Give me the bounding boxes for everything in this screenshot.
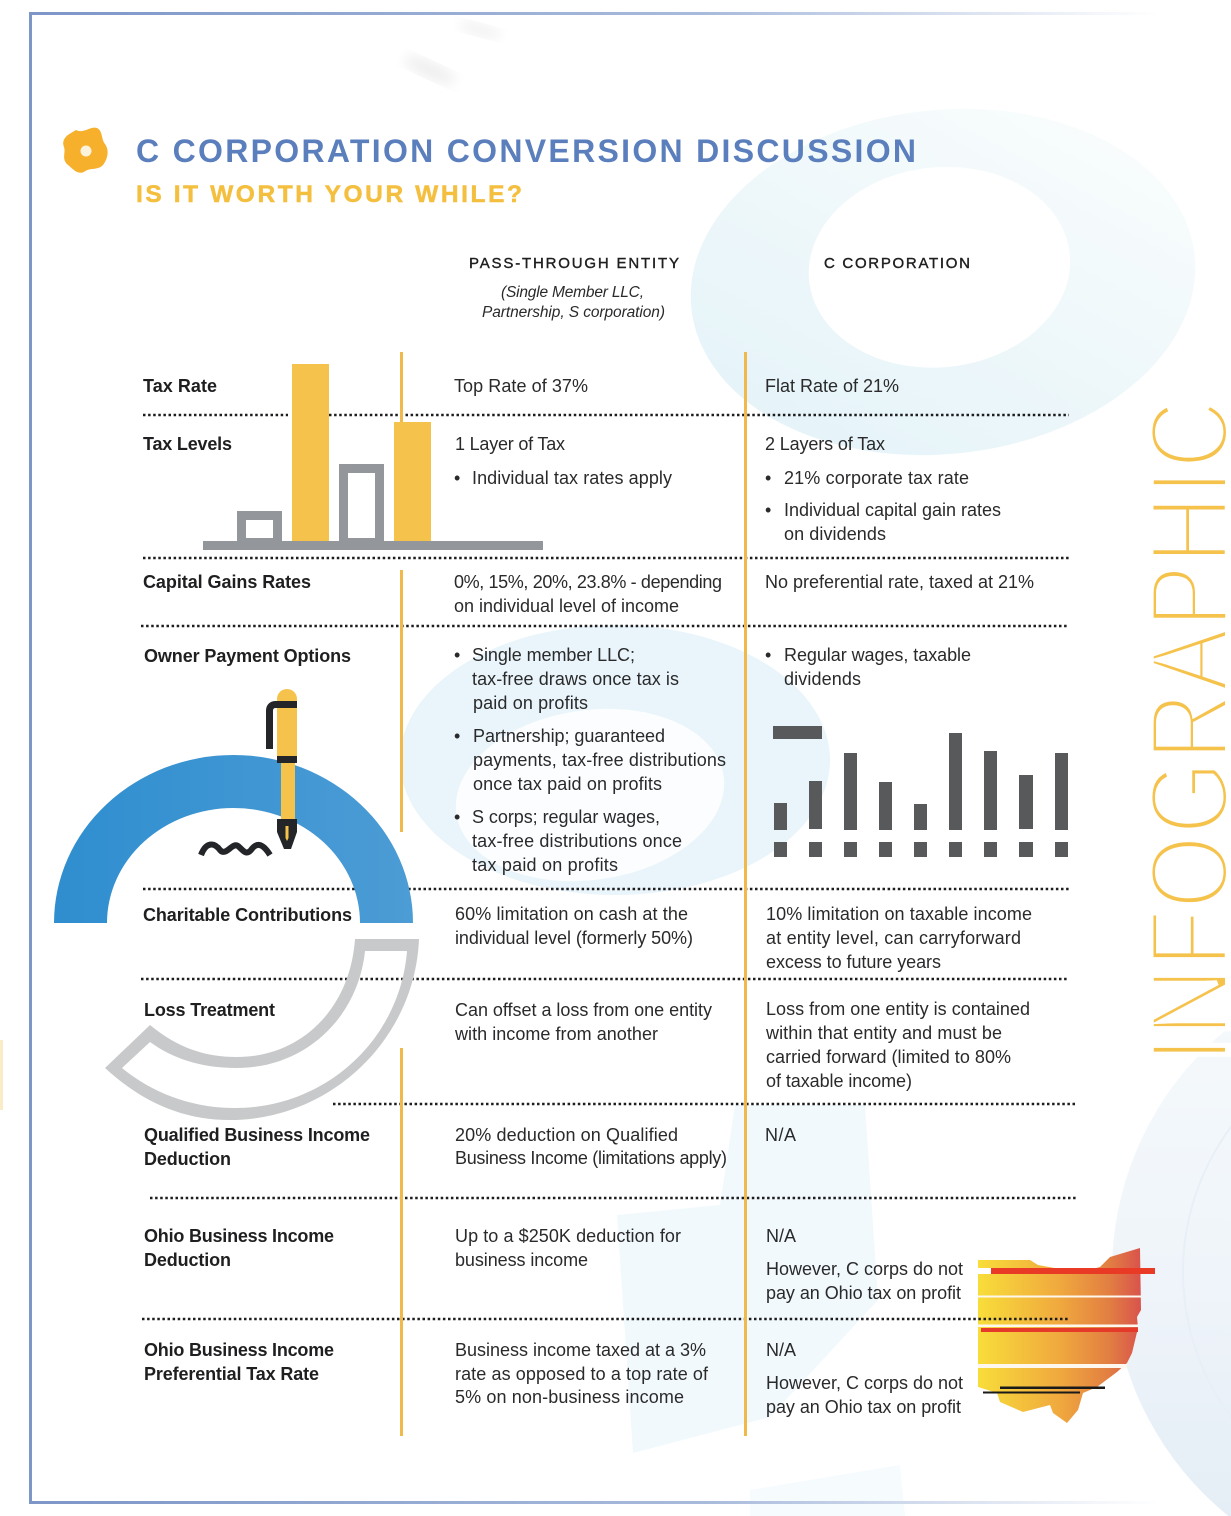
row: tax levels: •	[454, 468, 460, 488]
row: owner payment options: •	[454, 807, 460, 827]
row: charitable contributions: excess to future years	[766, 952, 941, 972]
row: loss treatment: of taxable income)	[766, 1071, 912, 1091]
title: C CORPORATION CONVERSION DISCUSSION	[136, 133, 916, 169]
row: Ohio business income preferential tax rate: However, C corps do not	[766, 1373, 963, 1393]
row: tax levels: 2 Layers of Tax	[765, 434, 885, 454]
icon: orange flower logo	[63, 128, 108, 173]
row: charitable contributions: individual level (formerly 50%)	[455, 928, 693, 948]
row: capital gains rates: No preferential rate, taxed at 21%	[765, 572, 1034, 592]
row: qualified business income deduction: N/A	[765, 1125, 796, 1145]
column header: pass-through entity	[469, 255, 679, 321]
row: loss treatment: Loss Treatment	[144, 1000, 275, 1020]
subtitle: IS IT WORTH YOUR WHILE?	[136, 181, 522, 208]
grey open arc	[105, 939, 419, 1120]
row: tax levels: Individual capital gain rates	[784, 500, 1001, 520]
row: charitable contributions: at entity level, can carryforward	[766, 928, 1021, 948]
row: Ohio business income preferential tax rate: Preferential Tax Rate	[144, 1364, 319, 1384]
row: owner payment options	[144, 645, 971, 875]
blue semicircle arc	[54, 755, 413, 923]
row: tax levels: Tax Levels	[143, 434, 232, 454]
row: owner payment options: •	[454, 726, 460, 746]
row: Ohio business income deduction: Up to a $250K deduction for	[455, 1226, 681, 1246]
row: Ohio business income preferential tax rate: N/A	[766, 1340, 796, 1360]
row: tax levels: on dividends	[784, 524, 886, 544]
row: charitable contributions	[143, 904, 1032, 972]
row: Ohio business income deduction	[144, 1226, 963, 1303]
row: loss treatment: Loss from one entity is contained	[766, 999, 1030, 1019]
row: Ohio business income deduction: Ohio Business Income	[144, 1226, 334, 1246]
row: tax levels	[143, 434, 1001, 544]
column header: C corporation: C CORPORATION	[824, 255, 970, 272]
row: capital gains rates: 0%, 15%, 20%, 23.8% - depending	[454, 572, 722, 592]
row: owner payment options: payments, tax-free distributions	[473, 750, 726, 770]
row: tax levels: Individual tax rates apply	[472, 468, 672, 488]
row: owner payment options: Regular wages, taxable	[784, 645, 971, 665]
row: qualified business income deduction	[144, 1125, 796, 1169]
row: tax levels: 1 Layer of Tax	[455, 434, 565, 454]
column header: pass-through entity: Partnership, S corporation)	[482, 304, 665, 321]
row: Ohio business income preferential tax rate: Ohio Business Income	[144, 1340, 334, 1360]
row: tax rate	[143, 376, 899, 396]
column header: pass-through entity: (Single Member LLC,	[501, 284, 644, 301]
bar chart icon: yellow and grey bars	[203, 364, 543, 550]
row: qualified business income deduction: Qualified Business Income	[144, 1125, 370, 1145]
row: charitable contributions: 60% limitation on cash at the	[455, 904, 688, 924]
row: owner payment options: Owner Payment Options	[144, 646, 351, 666]
row: tax levels: 21% corporate tax rate	[784, 468, 969, 488]
row: loss treatment: with income from another	[454, 1024, 658, 1044]
row: tax rate: Flat Rate of 21%	[765, 376, 899, 396]
row: owner payment options: •	[765, 645, 771, 665]
row: tax rate: Tax Rate	[143, 376, 217, 396]
row: charitable contributions: 10% limitation on taxable income	[766, 904, 1032, 924]
row: owner payment options: Single member LLC;	[472, 645, 635, 665]
row: qualified business income deduction: Business Income (limitations apply)	[455, 1148, 727, 1168]
row: Ohio business income deduction: Deduction	[144, 1250, 231, 1270]
row: owner payment options: •	[454, 645, 460, 665]
row: loss treatment: carried forward (limited to 80%	[766, 1047, 1011, 1067]
row: Ohio business income deduction: business income	[455, 1250, 588, 1270]
row: charitable contributions: Charitable Contributions	[143, 905, 352, 925]
row: owner payment options: S corps; regular wages,	[472, 807, 660, 827]
row: capital gains rates: on individual level of income	[454, 596, 679, 616]
column header: pass-through entity: PASS-THROUGH ENTITY	[469, 255, 679, 272]
row: loss treatment: Can offset a loss from one entity	[455, 1000, 712, 1020]
row: owner payment options: tax paid on profits	[472, 855, 618, 875]
row: tax rate: Top Rate of 37%	[454, 376, 588, 396]
dark bar chart icon	[773, 726, 1068, 857]
row: Ohio business income deduction: pay an Ohio tax on profit	[766, 1283, 961, 1303]
icon: Ohio map with stripes	[978, 1248, 1155, 1423]
row: owner payment options: once tax paid on profits	[473, 774, 662, 794]
row: Ohio business income deduction: N/A	[766, 1226, 796, 1246]
row: owner payment options: dividends	[784, 669, 861, 689]
row: owner payment options: tax-free draws once tax is	[472, 669, 679, 689]
row: Ohio business income preferential tax rate: rate as opposed to a top rate of	[455, 1364, 709, 1384]
row: tax levels: •	[765, 500, 771, 520]
row: Ohio business income preferential tax rate: Business income taxed at a 3%	[455, 1340, 706, 1360]
row: Ohio business income preferential tax rate: 5% on non-business income	[455, 1387, 684, 1407]
row: qualified business income deduction: Deduction	[144, 1149, 231, 1169]
row: tax levels: •	[765, 468, 771, 488]
row: owner payment options: Partnership; guaranteed	[473, 726, 665, 746]
row: Ohio business income preferential tax rate	[144, 1340, 963, 1417]
row: loss treatment: within that entity and must be	[765, 1023, 1002, 1043]
row: capital gains rates	[143, 572, 1034, 616]
row: capital gains rates: Capital Gains Rates	[143, 572, 311, 592]
row: owner payment options: tax-free distributions once	[472, 831, 682, 851]
icon: fountain pen and signature	[201, 689, 297, 855]
row: qualified business income deduction: 20% deduction on Qualified	[455, 1125, 678, 1145]
row: Ohio business income preferential tax rate: pay an Ohio tax on profit	[766, 1397, 961, 1417]
row: Ohio business income deduction: However, C corps do not	[766, 1259, 963, 1279]
row: loss treatment	[144, 999, 1030, 1091]
row: owner payment options: paid on profits	[473, 693, 588, 713]
